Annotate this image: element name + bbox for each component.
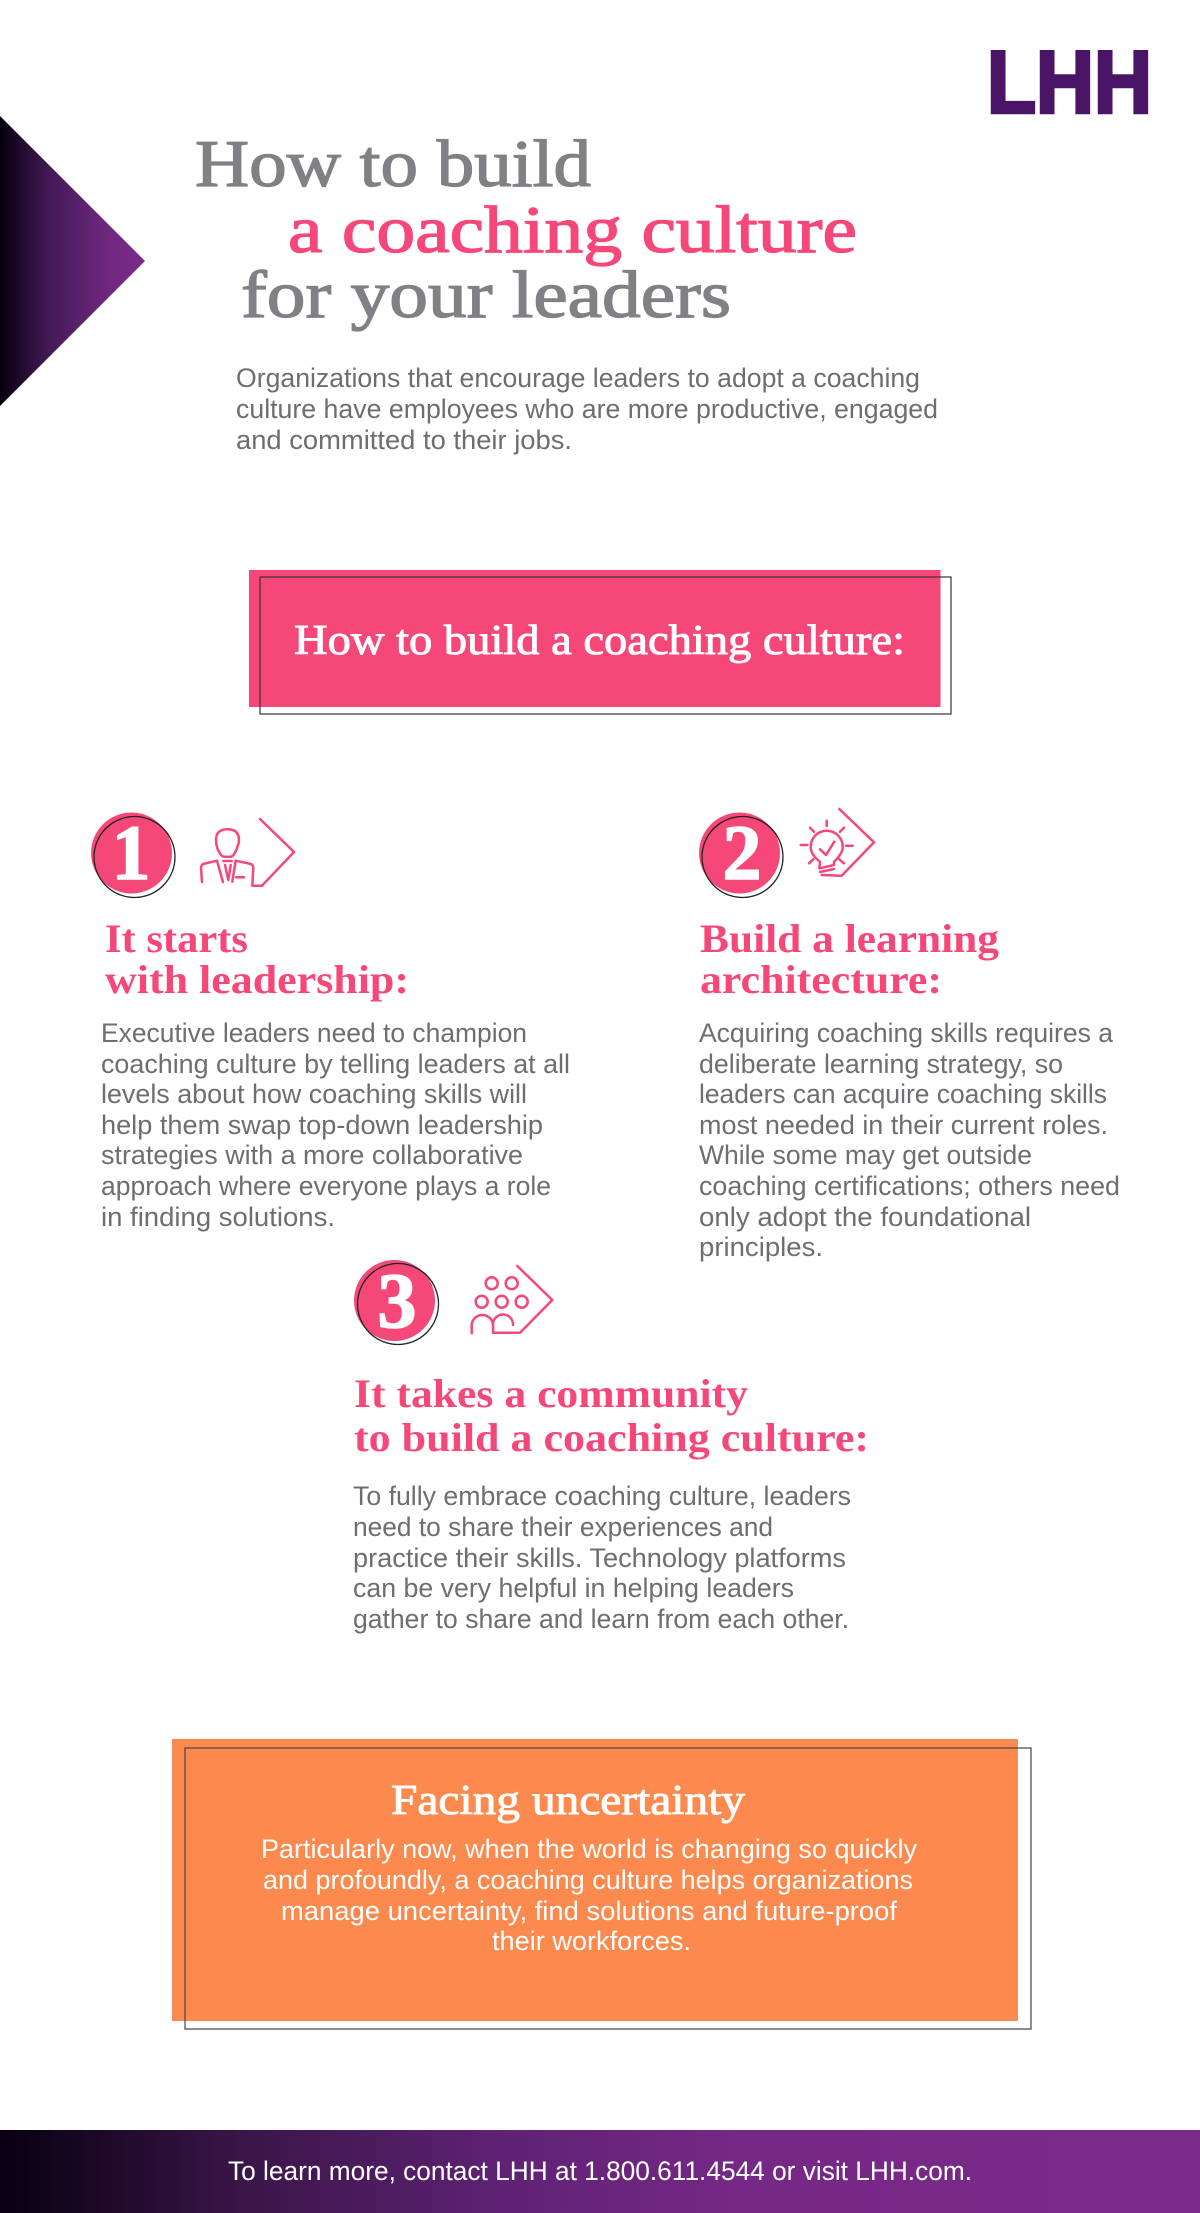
section 1 heading: It starts	[105, 916, 248, 961]
section 3 body: need to share their experiences and	[353, 1512, 773, 1542]
section 2 body: deliberate learning strategy, so	[699, 1049, 1063, 1079]
intro text: Organizations that encourage leaders to adopt a coaching	[236, 363, 920, 393]
section 3 heading: It takes a community	[354, 1371, 748, 1416]
panel heading: Facing uncertainty	[391, 1778, 745, 1824]
section 2 heading: Build a learning	[700, 916, 999, 961]
section 2 heading: architecture:	[700, 957, 942, 1002]
icon: group of people with arrow	[472, 1266, 552, 1333]
section 2 body: principles.	[699, 1232, 823, 1262]
section 1 body: help them swap top-down leadership	[101, 1110, 543, 1140]
number badge 3	[354, 1257, 438, 1344]
section 1 body: strategies with a more collaborative	[101, 1140, 523, 1170]
section 1 body: Executive leaders need to champion	[101, 1018, 527, 1048]
section 1 body: levels about how coaching skills will	[101, 1079, 527, 1109]
number badge 3: 3	[378, 1257, 416, 1344]
panel: facing uncertainty	[172, 1739, 1031, 2029]
panel body: their workforces.	[492, 1926, 691, 1956]
panel body	[261, 1834, 917, 1956]
title: a coaching culture	[288, 193, 857, 267]
section 2 body: While some may get outside	[699, 1140, 1032, 1170]
section 2 body: coaching certifications; others need	[699, 1171, 1120, 1201]
title	[195, 127, 857, 332]
icon: leader in suit with arrow	[201, 819, 294, 886]
intro text: culture have employees who are more productive, engaged	[236, 394, 938, 424]
section 3 body: can be very helpful in helping leaders	[353, 1573, 794, 1603]
banner heading: How to build a coaching culture:	[294, 618, 905, 664]
section 3 body: practice their skills. Technology platforms	[353, 1543, 846, 1573]
section 3 body: To fully embrace coaching culture, leaders	[353, 1481, 851, 1511]
section 1 heading: with leadership:	[105, 957, 409, 1002]
section 1: it starts with leadership	[91, 809, 570, 1232]
panel body: and profoundly, a coaching culture helps organizations	[263, 1865, 913, 1895]
LHH logo: LHH	[987, 32, 1152, 131]
intro text: and committed to their jobs.	[236, 425, 572, 455]
number badge 1	[91, 809, 175, 898]
footer bar	[0, 2130, 1200, 2213]
section 2: build a learning architecture	[699, 809, 1120, 1262]
footer contact text: To learn more, contact LHH at 1.800.611.4544 or visit LHH.com.	[228, 2156, 972, 2186]
section 2 body: leaders can acquire coaching skills	[699, 1079, 1107, 1109]
section 2 body: most needed in their current roles.	[699, 1110, 1108, 1140]
number badge 2: 2	[722, 809, 762, 896]
section 1 body: in finding solutions.	[101, 1202, 335, 1232]
section 1 body: approach where everyone plays a role	[101, 1171, 551, 1201]
section 1 body: coaching culture by telling leaders at all	[101, 1049, 570, 1079]
section 1 heading	[105, 916, 409, 1002]
intro text	[236, 363, 938, 455]
number badge 2	[699, 809, 783, 898]
section 2 body: only adopt the foundational	[699, 1202, 1031, 1232]
section 1 body	[101, 1018, 570, 1232]
icon: light bulb with arrow	[801, 809, 874, 876]
decorative gradient triangle	[0, 116, 145, 406]
panel body: Particularly now, when the world is changing so quickly	[261, 1834, 917, 1864]
title: for your leaders	[241, 258, 731, 332]
section 3 body	[353, 1481, 851, 1634]
title: How to build	[195, 127, 591, 201]
section 3 heading	[354, 1371, 869, 1460]
section 3: it takes a community	[353, 1257, 869, 1634]
section 2 body: Acquiring coaching skills requires a	[699, 1018, 1114, 1048]
number badge 1: 1	[112, 809, 150, 896]
banner: how to build a coaching culture	[249, 570, 951, 714]
section 3 heading: to build a coaching culture:	[354, 1415, 869, 1460]
section 2 heading	[700, 916, 999, 1002]
panel body: manage uncertainty, find solutions and future-proof	[281, 1896, 897, 1926]
section 2 body	[699, 1018, 1120, 1262]
section 3 body: gather to share and learn from each other.	[353, 1604, 849, 1634]
